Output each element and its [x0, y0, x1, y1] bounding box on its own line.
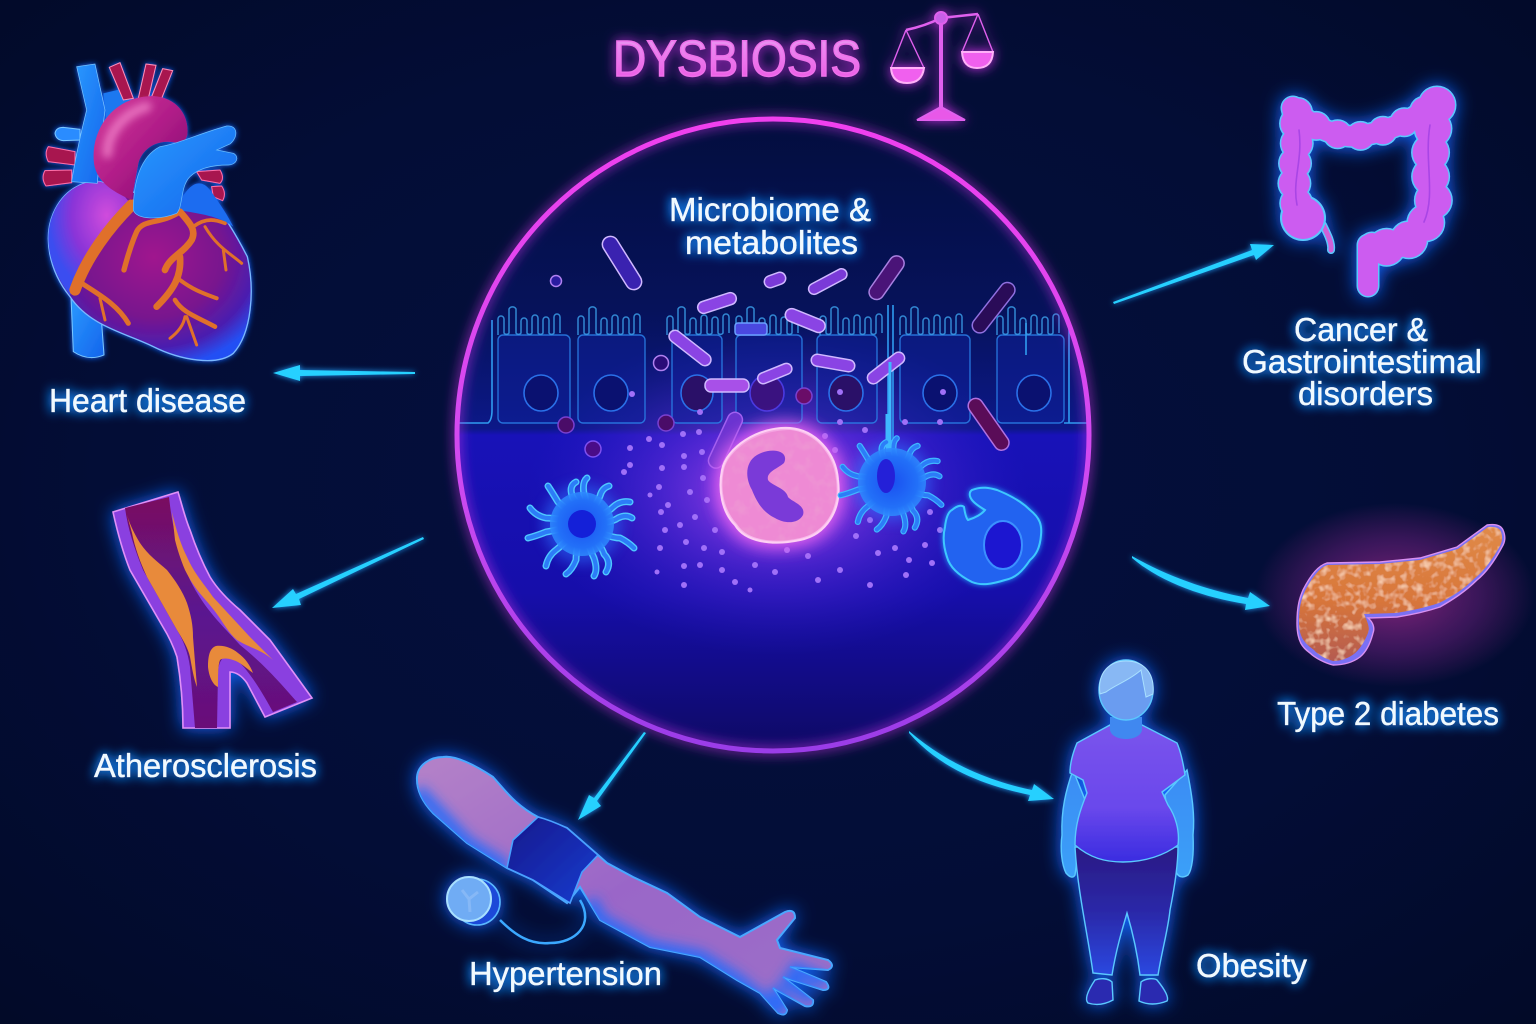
arrow: to cancer [1113, 244, 1274, 304]
plaque: right wall [172, 512, 273, 660]
label: obesity: Obesity [1196, 947, 1307, 984]
icon: colon [1280, 102, 1437, 286]
label: cancer and gastrointestinal disorders: disorders [1298, 375, 1433, 412]
right arm [1165, 770, 1194, 877]
ventricles [48, 181, 251, 361]
pancreas rim [1297, 525, 1505, 665]
gauge case [454, 879, 500, 925]
inferior vena cava [71, 297, 104, 358]
pancreas body [1299, 527, 1502, 661]
right foot [1139, 979, 1168, 1004]
cuff [507, 817, 598, 903]
arm underside shading [417, 790, 826, 1015]
colon outline [1280, 102, 1437, 286]
epithelial cells [498, 335, 1064, 423]
icon: person [1061, 660, 1194, 1004]
label: cancer and gastrointestinal disorders: Cancer & [1294, 311, 1428, 348]
label: microbiome: metabolites [685, 224, 858, 261]
blue right lobe [177, 183, 233, 227]
left arm [1061, 770, 1085, 877]
gauge tube [500, 900, 585, 943]
icon: heart [43, 63, 251, 361]
right vessels [197, 170, 224, 201]
aortic branches [109, 63, 173, 100]
metabolite dots [621, 389, 961, 592]
arrow: to heart disease [273, 365, 415, 381]
torso [1070, 725, 1185, 862]
pulmonary artery [133, 126, 237, 218]
left foot [1087, 979, 1113, 1004]
neck [1110, 717, 1142, 739]
icon: artery [113, 492, 312, 728]
superior vena cava [103, 89, 130, 123]
arrow: to obesity [909, 731, 1054, 801]
label: microbiome: Microbiome & [669, 191, 871, 228]
artery wall [113, 492, 312, 728]
legs [1075, 847, 1178, 975]
head [1099, 660, 1153, 720]
dendritic cell left [528, 478, 634, 576]
label: hypertension: Hypertension [469, 955, 662, 992]
tissue layers [456, 233, 1092, 655]
small left vessels [55, 127, 80, 141]
aortic highlight [107, 107, 147, 153]
atrium [48, 181, 132, 295]
panel: microbiome circle [456, 119, 1092, 751]
bacteria [599, 233, 1018, 471]
title: DYSBIOSIS [613, 30, 861, 87]
colon fill [1282, 102, 1437, 286]
plaque: left wall [127, 515, 197, 687]
halo: pancreas [1255, 503, 1535, 687]
hair [1100, 661, 1153, 697]
arrow: to type 2 diabetes [1132, 556, 1270, 610]
dendritic cell right [841, 362, 941, 531]
coronary vessels [75, 205, 242, 345]
microvilli [498, 307, 1059, 335]
gauge face [447, 877, 491, 921]
cell nuclei [524, 375, 1051, 411]
icon: arm with blood pressure cuff [417, 757, 832, 1015]
aortic arch [94, 96, 188, 200]
label: microbiome [669, 191, 871, 261]
label: cancer and gastrointestinal disorders: Gastrointestimal [1242, 343, 1482, 380]
arrow: to atherosclerosis [272, 537, 424, 608]
label: heart disease: Heart disease [49, 382, 246, 419]
colon seam shading [1296, 125, 1430, 222]
metabolite spheres [550, 276, 812, 457]
plaque: branch [208, 646, 253, 687]
icon: balance scale [891, 12, 993, 120]
appendix [1323, 225, 1331, 250]
macrophage [944, 488, 1041, 584]
circle outline [457, 119, 1089, 751]
arrow: to hypertension [578, 732, 646, 820]
label: type 2 diabetes: Type 2 diabetes [1277, 695, 1499, 732]
icon: pancreas [1297, 525, 1505, 665]
label: atherosclerosis: Atherosclerosis [94, 747, 317, 784]
lumen [125, 497, 297, 728]
neutrophil [721, 428, 839, 543]
label: cancer and gastrointestinal disorders [1242, 311, 1482, 412]
arm [417, 757, 832, 1014]
